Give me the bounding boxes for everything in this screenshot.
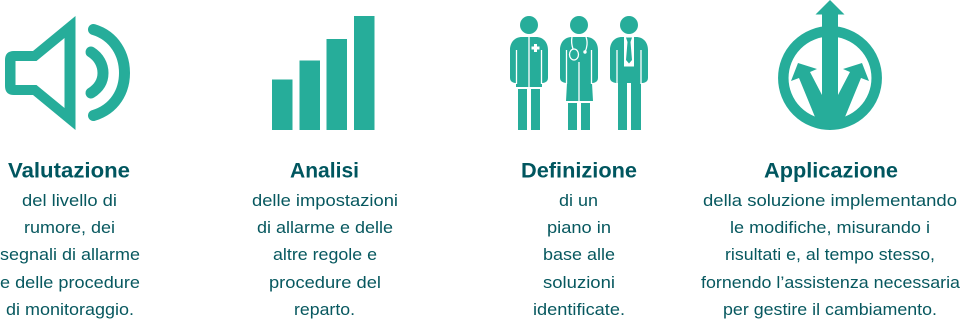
heading: Applicazione: Applicazione bbox=[764, 160, 898, 182]
icon: three doctors bbox=[510, 16, 648, 130]
text block: definizione description bbox=[533, 191, 625, 319]
text block: applicazione description: fornendo l’assistenza necessaria bbox=[701, 273, 960, 292]
text block: analisi description: di allarme e delle bbox=[257, 218, 393, 237]
text block: definizione description: soluzioni bbox=[543, 273, 615, 292]
text block: valutazione description: del livello di bbox=[22, 191, 117, 210]
icon: doctor with tie bbox=[610, 16, 648, 130]
text block: definizione description: piano in bbox=[547, 218, 611, 237]
text block: valutazione description: di monitoraggio. bbox=[6, 300, 134, 319]
panel: analisi bbox=[252, 16, 398, 319]
text block: analisi description: reparto. bbox=[294, 300, 355, 319]
heading: Analisi: Analisi bbox=[290, 160, 359, 182]
text block: valutazione description bbox=[0, 191, 140, 319]
text block: applicazione description: per gestire il cambiamento. bbox=[723, 300, 937, 319]
text block: analisi description: procedure del bbox=[269, 273, 381, 292]
text block: applicazione description: le modifiche, misurando i bbox=[730, 218, 930, 237]
text block: definizione description: identificate. bbox=[533, 300, 625, 319]
text block: valutazione description: segnali di allarme bbox=[0, 245, 140, 264]
icon: speaker bbox=[5, 16, 124, 130]
text block: definizione description: base alle bbox=[543, 245, 615, 264]
icon: doctor with cross bbox=[510, 16, 548, 130]
panel: valutazione bbox=[0, 16, 140, 319]
text block: analisi description: altre regole e bbox=[273, 245, 377, 264]
icon: bar chart bbox=[272, 16, 374, 130]
panel: definizione bbox=[510, 16, 648, 319]
text block: definizione description: di un bbox=[559, 191, 598, 210]
heading: Definizione: Definizione bbox=[521, 160, 637, 182]
text block: valutazione description: rumore, dei bbox=[24, 218, 115, 237]
heading: Valutazione: Valutazione bbox=[8, 160, 130, 182]
text block: valutazione description: e delle procedure bbox=[0, 273, 140, 292]
icon: doctor with stethoscope bbox=[560, 16, 598, 130]
text block: analisi description: delle impostazioni bbox=[252, 191, 398, 210]
text block: applicazione description: risultati e, al tempo stesso, bbox=[725, 245, 935, 264]
text block: applicazione description bbox=[701, 191, 960, 319]
text block: analisi description bbox=[252, 191, 398, 319]
panel: applicazione bbox=[701, 0, 960, 319]
text block: applicazione description: della soluzione implementando bbox=[703, 191, 957, 210]
icon: circle with three arrows bbox=[783, 0, 877, 127]
